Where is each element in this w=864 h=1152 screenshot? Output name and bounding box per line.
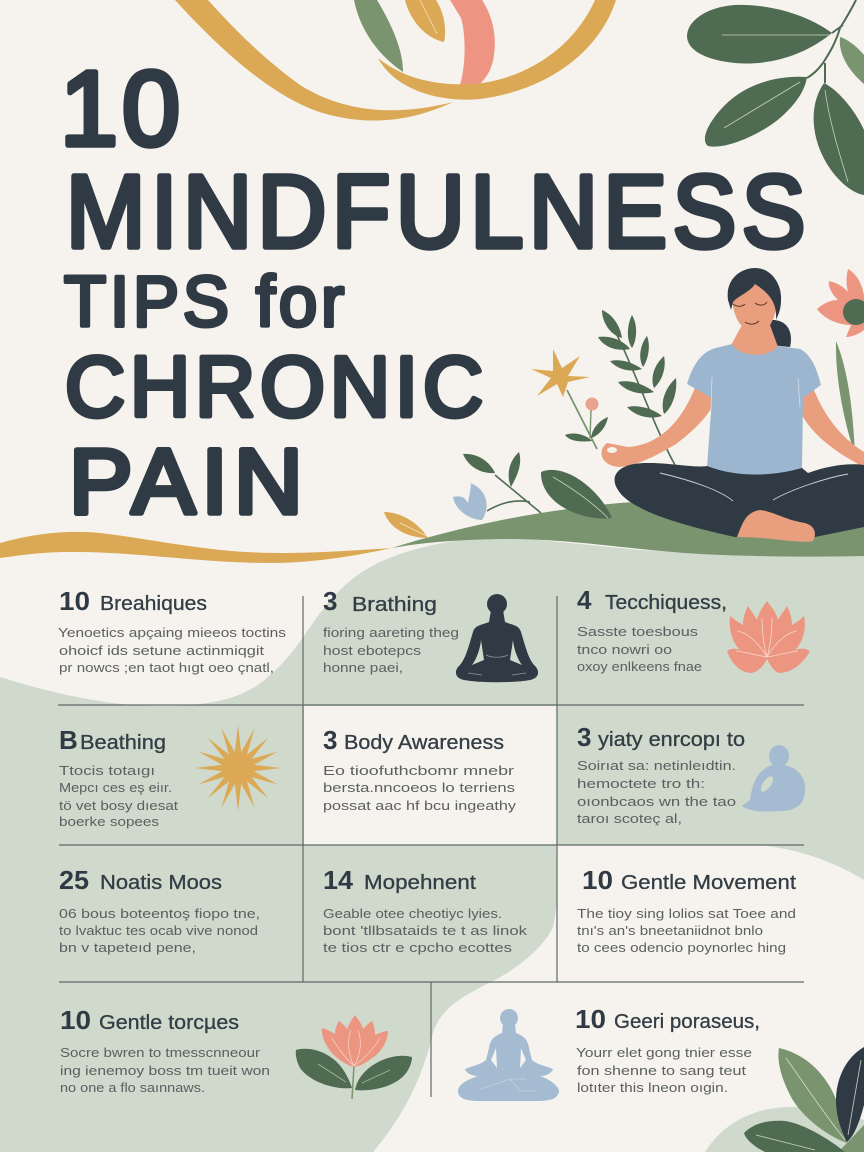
leaf xyxy=(814,83,864,195)
face details xyxy=(733,302,767,324)
tip 11: 10 xyxy=(575,1004,606,1034)
tip 1 xyxy=(58,586,287,675)
cream cell: body awareness xyxy=(304,706,557,845)
tip 8: te tios ctr e cpcho ecottes xyxy=(323,940,513,955)
tip 9 xyxy=(577,865,796,955)
pink ribbon xyxy=(450,0,495,85)
tip 7 xyxy=(59,865,260,955)
tip 3 xyxy=(577,585,727,674)
tip 3: tnco nowri oo xyxy=(577,642,672,657)
tip 4: Ttocis totaıgı xyxy=(59,763,155,778)
tip 2: Brathing xyxy=(352,594,437,616)
tip 9: tnı's an's bneetaniidnot bnlo xyxy=(577,923,763,938)
icon: salmon lotus xyxy=(727,601,810,673)
tip 1: 10 xyxy=(59,586,90,616)
green leaf xyxy=(744,1121,845,1152)
tip 5: Body Awareness xyxy=(344,732,504,754)
tip 10 xyxy=(60,1005,270,1095)
tip 3: Tecchiquess, xyxy=(605,592,727,614)
tip 4 xyxy=(59,725,178,829)
botanical illustration xyxy=(453,269,864,520)
tip 5: 3 xyxy=(323,725,337,755)
tip 3: oxoy enlkeens fnae xyxy=(577,659,702,674)
tip 2: fioring aareting theg xyxy=(323,625,459,640)
top decorative ribbons and leaves xyxy=(175,0,616,121)
icon: dark meditating figure xyxy=(456,594,538,682)
tip 6: Soirıat sa: netinleıdtin. xyxy=(577,758,736,773)
tip 10: 10 xyxy=(60,1005,91,1035)
tall fern xyxy=(598,310,676,465)
tip 9: 10 xyxy=(582,865,613,895)
gold leaf on hill xyxy=(384,512,428,538)
tip 6: taroı scoteç al, xyxy=(577,811,682,826)
tip 7: to lvaktuc tes ocab vive nonod xyxy=(59,923,258,938)
sage leaf top xyxy=(354,0,403,72)
green hill xyxy=(392,501,864,557)
salmon flower xyxy=(817,269,864,337)
tip 2: host ebotepcs xyxy=(323,643,422,658)
tip 4: B xyxy=(59,725,78,755)
arms xyxy=(601,385,716,467)
icon: gold sun xyxy=(195,725,281,811)
tip 4: Mepcı ces eş eiır. xyxy=(59,780,172,795)
tip 11 xyxy=(575,1004,760,1095)
icon: lotus with leaves xyxy=(296,1015,412,1099)
title: 10 xyxy=(60,50,184,168)
tip 1: ohoicf ids setune actinmiqgit xyxy=(59,643,264,658)
grid lines xyxy=(58,596,804,1097)
tip 7: Noatis Moos xyxy=(100,872,222,894)
leaf xyxy=(705,77,807,147)
leaf xyxy=(687,5,832,63)
tip 11: Geeri poraseus, xyxy=(614,1011,760,1033)
tip 8: bont 'tllbsataids te t as linok xyxy=(323,923,528,938)
dark leaf xyxy=(836,1047,864,1142)
tip 9: The tioy sing lolios sat Toee and xyxy=(577,906,796,921)
legs xyxy=(615,463,864,537)
tip 10: no one a flo saınnaws. xyxy=(60,1080,205,1095)
small sprig and blue bud xyxy=(453,452,541,520)
tip 6: yiaty enrcopı to xyxy=(598,729,745,751)
tip 6 xyxy=(577,722,745,826)
gold ribbon: lower wave xyxy=(0,532,392,563)
tip 8: Geable otee cheotiyc lyies. xyxy=(323,906,502,921)
large hill leaf xyxy=(541,470,612,519)
tip 10: ing ienemoy boss tm tueit won xyxy=(60,1063,270,1078)
tip 2 xyxy=(323,586,459,675)
title: MINDFULNESS xyxy=(66,154,811,269)
title: TIPS for xyxy=(64,263,348,342)
gold ribbon upper swirl xyxy=(175,0,453,121)
tip 4: tö vet bosy dıesat xyxy=(59,798,178,813)
tip 8 xyxy=(323,865,528,955)
tip 6: oıonbcaos wn the tao xyxy=(577,794,736,809)
tip 5: possat aac hf bcu ingeathy xyxy=(323,798,517,813)
title: PAIN xyxy=(69,431,309,533)
tip 3: Sasste toesbous xyxy=(577,624,699,639)
tip 9: to cees odencio poynorlec hing xyxy=(577,940,786,955)
tip 1: Yenoetics apçaing mieeos toctins xyxy=(58,625,287,640)
leaf corner xyxy=(840,37,864,84)
neck xyxy=(730,325,778,357)
tip 10: Socre bwren to tmesscnneour xyxy=(60,1045,261,1060)
shirt xyxy=(687,344,821,476)
gold star flower xyxy=(531,349,608,449)
bottom right leaves xyxy=(744,1047,864,1152)
tip 1: Breahiques xyxy=(100,593,207,615)
hair back xyxy=(768,320,791,347)
tip 5: bersta.nncoeos lo terriens xyxy=(323,780,516,795)
leaf branch top right xyxy=(687,0,864,195)
tip 2: honne paei, xyxy=(323,660,403,675)
gold leaf top xyxy=(405,0,445,42)
tip 6: hemoctete tro th: xyxy=(577,776,705,791)
tip 11: lotıter this lneon oıgin. xyxy=(577,1080,728,1095)
sage hill bottom right xyxy=(705,1107,864,1152)
tip 8: Mopehnent xyxy=(364,872,476,894)
tip 5: Eo tioofuthcbomr mnebr xyxy=(323,763,515,778)
title: CHRONIC xyxy=(65,340,488,435)
tip 7: bn v tapeteıd pene, xyxy=(59,940,196,955)
meditating woman xyxy=(601,268,864,542)
tip 4: boerke sopees xyxy=(59,814,160,829)
tip 3: 4 xyxy=(577,585,592,615)
tip 11: Yourr elet gong tnier esse xyxy=(576,1045,752,1060)
tip 5 xyxy=(323,725,517,813)
sage background shape xyxy=(0,538,864,1152)
title xyxy=(60,50,811,533)
tip 7: 25 xyxy=(59,865,89,895)
hair xyxy=(728,268,781,320)
tip 2: 3 xyxy=(323,586,337,616)
tip 9: Gentle Movement xyxy=(621,872,796,894)
tip 6: 3 xyxy=(577,722,591,752)
tip 8: 14 xyxy=(323,865,354,895)
foot xyxy=(737,510,815,542)
right tall leaf xyxy=(836,341,855,455)
face xyxy=(732,284,777,333)
tip 4: Beathing xyxy=(80,732,166,754)
tip 11: fon shenne to sang teut xyxy=(577,1063,746,1078)
icon: blue seated figure xyxy=(742,745,805,811)
tip 1: pr nowcs ;en taot hıgt oeo çnatl, xyxy=(59,660,274,675)
icon: blue meditator xyxy=(458,1009,559,1101)
tip 7: 06 bous boteentoş fiopo tne, xyxy=(59,906,260,921)
sage leaf xyxy=(778,1048,847,1143)
tip 10: Gentle torcµes xyxy=(99,1012,239,1034)
